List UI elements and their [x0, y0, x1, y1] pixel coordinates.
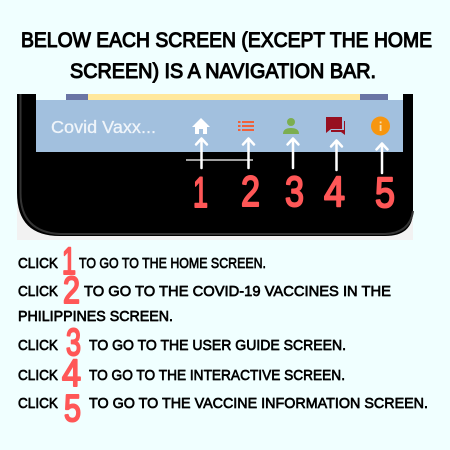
instruction 4: 4 — [62, 353, 81, 395]
app name: Covid Vaxx... — [51, 117, 156, 137]
top strip of screen — [36, 94, 403, 100]
instruction 5: TO GO TO THE VACCINE INFORMATION SCREEN. — [89, 395, 428, 412]
instruction 1 — [18, 241, 266, 283]
arrow 1 — [196, 138, 207, 168]
title: SCREEN) IS A NAVIGATION BAR. — [70, 60, 376, 83]
number 2: 2 — [241, 168, 260, 216]
phone backdrop — [17, 94, 413, 240]
instruction 2: 2 — [63, 270, 80, 312]
phone body — [17, 94, 413, 236]
title — [21, 29, 432, 83]
instruction 5 — [18, 388, 428, 430]
instruction 3: 3 — [66, 322, 81, 364]
instruction 5: CLICK — [18, 395, 58, 412]
instruction 2: PHILIPPINES SCREEN. — [18, 308, 173, 325]
instruction 4: CLICK — [18, 367, 58, 384]
instruction 1: CLICK — [18, 255, 58, 272]
instruction 3: TO GO TO THE USER GUIDE SCREEN. — [89, 337, 346, 354]
number 4: 4 — [324, 168, 345, 216]
number 1: 1 — [193, 169, 208, 217]
icon: chat — [326, 117, 345, 135]
instruction 4 — [18, 353, 345, 395]
connector line between 1 and 2 — [186, 159, 253, 161]
arrow 2 — [243, 138, 254, 168]
icon: info — [371, 116, 390, 136]
phone bezel edge — [20, 94, 413, 234]
navigation bar — [36, 100, 403, 152]
arrow 3 — [288, 138, 298, 168]
instruction 2: TO GO TO THE COVID-19 VACCINES IN THE — [84, 283, 391, 300]
icon: person — [283, 118, 299, 134]
icon: list — [238, 121, 254, 131]
number 5: 5 — [375, 169, 395, 217]
instruction 2 — [18, 270, 391, 325]
arrow 5 — [376, 144, 388, 173]
instruction 5: 5 — [64, 388, 81, 430]
phone screenshot — [17, 94, 413, 240]
number 3: 3 — [285, 168, 304, 216]
instruction 4: TO GO TO THE INTERACTIVE SCREEN. — [89, 367, 345, 384]
instruction 3 — [18, 322, 346, 364]
instruction 1: TO GO TO THE HOME SCREEN. — [79, 255, 266, 272]
arrow 4 — [331, 140, 342, 170]
instruction 1: 1 — [62, 241, 76, 283]
icon: home — [192, 118, 210, 134]
instruction 2: CLICK — [18, 283, 58, 300]
instruction 3: CLICK — [18, 337, 58, 354]
